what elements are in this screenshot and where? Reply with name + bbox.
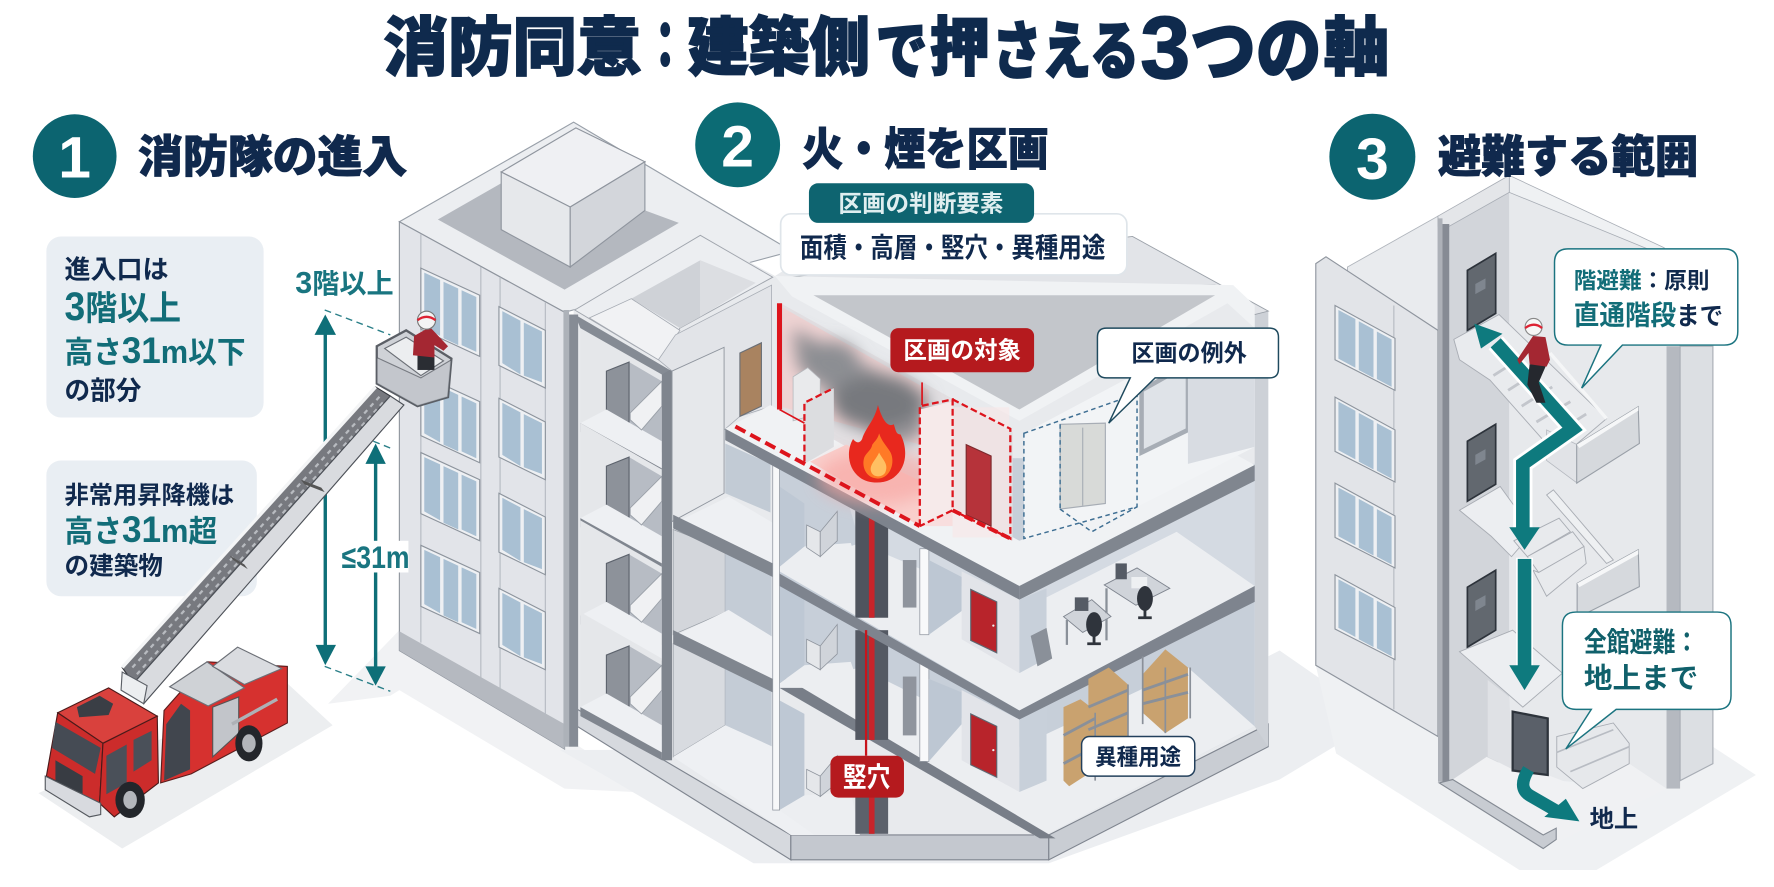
upper room back walls: [781, 303, 1013, 541]
lower room walls and floors: [780, 453, 1255, 838]
title: 建築側: [688, 12, 870, 84]
number badge 2: 2: [721, 114, 754, 179]
icon: flame: [849, 405, 905, 483]
partitions: [773, 457, 1047, 810]
fire truck with ladder: [45, 311, 451, 818]
red outline: [735, 303, 1010, 539]
floor: [1453, 757, 1667, 843]
parapet lower: [1577, 550, 1639, 618]
callout: floor evacuation: [1555, 249, 1738, 388]
callout: floor evacuation: 階避難：原則: [1574, 269, 1710, 294]
number badge 2: [695, 102, 780, 187]
number badge 1: [33, 114, 117, 198]
title: 押: [930, 12, 990, 84]
panel 1 heading: [33, 114, 407, 198]
arrow: up to stair door: [1474, 324, 1573, 532]
panel: entry opening info: 進入口は: [64, 254, 169, 284]
middle landing: [1459, 486, 1533, 557]
basket back: [377, 330, 451, 406]
penthouse box: [501, 128, 645, 267]
heading text 1: 消防隊の進入: [138, 133, 407, 182]
panel: emergency elevator info: の建築物: [64, 553, 163, 581]
roof: [399, 122, 792, 312]
body: [161, 647, 287, 783]
cab: [45, 688, 158, 817]
label 31 m: ≤31m: [342, 539, 410, 575]
dashed reference lines: [325, 310, 390, 691]
partition in room: [804, 388, 834, 464]
arrow: head down: [1509, 527, 1540, 550]
callout: whole-building evacuation: [1562, 612, 1731, 749]
heading text 3: 避難する範囲: [1438, 133, 1698, 182]
label 3F or above: 3階以上: [295, 266, 394, 300]
label: vertical shaft: [830, 630, 904, 798]
title: 軸: [1324, 12, 1389, 84]
firefighter on basket: [413, 311, 448, 370]
brown door: [740, 343, 761, 416]
teal evacuation route: [1474, 324, 1579, 821]
office furniture: [1031, 563, 1170, 666]
callout: whole-building evacuation: 全館避難：: [1584, 627, 1698, 658]
title: さえる: [992, 18, 1139, 88]
callout: whole-building evacuation: 地上まで: [1584, 662, 1698, 694]
building: main block with windows: [399, 122, 792, 749]
title: [384, 0, 1389, 97]
upper flight: [1454, 315, 1607, 445]
exception door: [1060, 423, 1105, 509]
panel: emergency elevator info: 非常用昇降機は: [64, 482, 234, 509]
pink wall and floor glow: [783, 308, 929, 447]
shaft: [855, 510, 916, 834]
number badge 1: 1: [58, 126, 91, 191]
panel: emergency elevator info: 高さ31m超: [64, 508, 217, 550]
ground shadows: [38, 630, 1756, 870]
section: cutaway building: [563, 235, 1268, 860]
outer shell: [574, 235, 1268, 860]
callout: compartment exception: 区画の例外: [1131, 340, 1247, 366]
basket front rail: [377, 358, 451, 406]
panel 2 heading: [695, 102, 1049, 187]
floor slab 2: [780, 574, 1255, 720]
storage shelves: [1063, 649, 1190, 786]
label: ground level: 地上: [1590, 806, 1638, 833]
front wheel: [115, 782, 145, 818]
stairwell: [563, 310, 672, 760]
fire compartment: [735, 303, 1010, 539]
stair roof box: [575, 235, 773, 360]
title: 3: [1140, 0, 1190, 97]
panel: entry opening info: 高さ31m以下: [64, 329, 246, 371]
number badge 3: 3: [1356, 127, 1389, 192]
middle walls next to stair: [658, 285, 860, 835]
rear wall and left wing: [1347, 216, 1438, 339]
building: evacuation stair: [1316, 175, 1713, 849]
criteria list box: [781, 214, 1127, 275]
title: ：: [645, 12, 686, 82]
left wall: [399, 222, 565, 749]
factor panel: compartment criteria: [781, 183, 1127, 275]
panel: entry opening info: 3階以上: [64, 285, 181, 329]
smoke: [792, 328, 929, 447]
panel: entry opening info: [46, 236, 264, 417]
callout: floor evacuation: 直通階段まで: [1574, 300, 1723, 331]
elevator lobbies: [780, 486, 860, 835]
red doors: [971, 589, 997, 777]
top floor slab: [725, 405, 1255, 586]
elevator in compartment: [793, 368, 820, 421]
lower landing: [1459, 630, 1562, 707]
upper roof band: [781, 236, 1268, 315]
number badge 3: [1329, 114, 1415, 200]
panel: entry opening info: の部分: [64, 375, 141, 405]
height dimension arrows: [295, 266, 410, 691]
ladder: [121, 387, 404, 704]
title: つの: [1190, 11, 1321, 92]
criteria list box: 面積・高層・竪穴・異種用途: [800, 232, 1105, 263]
arrow: exit to ground: [1523, 769, 1579, 821]
evacuee: [1517, 318, 1550, 403]
label: compartment target: [890, 328, 1034, 372]
label: vertical shaft: 竪穴: [843, 761, 890, 792]
parapet: [1577, 407, 1639, 483]
panel: emergency elevator info: [46, 460, 257, 596]
exception zone dashed box: [1024, 394, 1137, 539]
title: 消防同意: [384, 12, 641, 84]
arrow: floor-three height: [315, 315, 336, 665]
stairs: [1454, 315, 1639, 789]
title: で: [876, 18, 928, 88]
criteria tag: 区画の判断要素: [838, 191, 1004, 217]
windows: [1335, 305, 1395, 660]
arrow: down lower flight: [1509, 559, 1540, 690]
panel 3 heading: [1329, 114, 1698, 200]
arrow: 31 m height: [365, 444, 386, 686]
stair walls: [1509, 175, 1713, 789]
label: mixed use: 異種用途: [1095, 745, 1182, 770]
rear wheel: [235, 725, 262, 761]
red door top: [966, 445, 991, 526]
doors: [1467, 253, 1548, 775]
callout: compartment exception: [1097, 328, 1278, 423]
label: mixed use: [1082, 737, 1195, 776]
heading text 2: 火・煙を区画: [802, 124, 1049, 175]
label: compartment target: 区画の対象: [903, 338, 1021, 365]
windows: [421, 268, 545, 670]
criteria tag: [809, 183, 1034, 223]
